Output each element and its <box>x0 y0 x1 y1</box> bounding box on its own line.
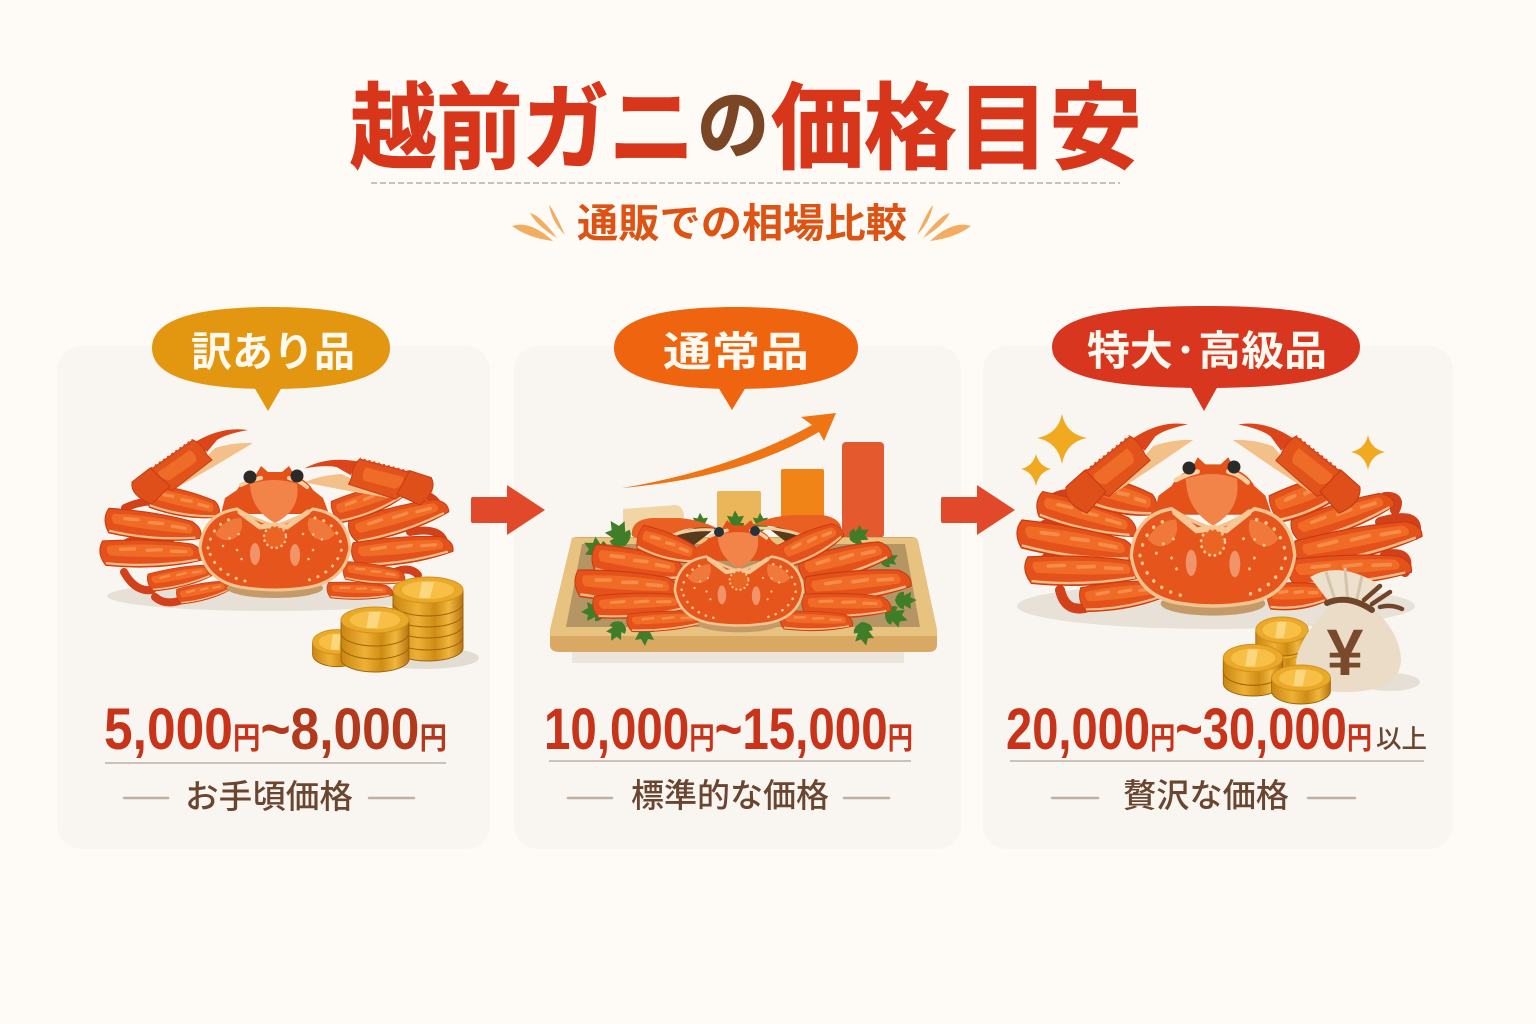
illustration: crab <box>99 428 479 672</box>
price: 20,000円~30,000円 <box>1006 697 1372 762</box>
title dashed divider <box>371 182 1120 184</box>
caption: お手頃価格 <box>185 770 353 818</box>
badge: 訳あり品 <box>152 307 390 411</box>
panel: 特大・高級品: 以上 <box>1376 719 1427 756</box>
caption: 贅沢な価格 <box>1123 769 1289 817</box>
illustration: crab on tray <box>550 510 937 663</box>
icon: sparkles <box>1021 414 1385 486</box>
price: 5,000円~8,000円 <box>104 697 447 762</box>
icon: yen money bag: ¥ <box>1327 615 1364 689</box>
title: 越前ガニ <box>350 53 695 189</box>
caption: 標準的な価格 <box>631 769 829 817</box>
icon: coins <box>1223 617 1308 696</box>
icon: left rays <box>512 205 565 241</box>
arrow: trend <box>622 413 836 488</box>
panel: 特大・高級品 <box>983 306 1453 849</box>
arrow 2 <box>941 485 1015 535</box>
badge: 特大・高級品 <box>1052 306 1360 411</box>
title: 価格目安 <box>771 53 1142 189</box>
title: の <box>697 64 769 174</box>
badge: 訳あり品: 訳あり品 <box>191 318 355 378</box>
badge: 特大・高級品: 特大·高級品 <box>1087 317 1327 377</box>
icon: yen money bag <box>1296 568 1420 692</box>
icon: right rays <box>917 205 971 241</box>
panel: 通常品 <box>514 307 961 849</box>
panel: 訳あり品 <box>57 307 490 849</box>
arrow 1 <box>471 485 545 535</box>
subtitle: 通販での相場比較 <box>577 191 907 249</box>
badge: 通常品 <box>614 307 858 410</box>
illustration: crab <box>1014 423 1424 704</box>
badge: 通常品: 通常品 <box>663 318 809 378</box>
icon: front coin <box>1272 665 1330 704</box>
chart: rising bars <box>623 442 884 538</box>
icon: coin stacks <box>312 577 479 672</box>
price: 10,000円~15,000円 <box>544 697 913 762</box>
title <box>350 53 1142 189</box>
